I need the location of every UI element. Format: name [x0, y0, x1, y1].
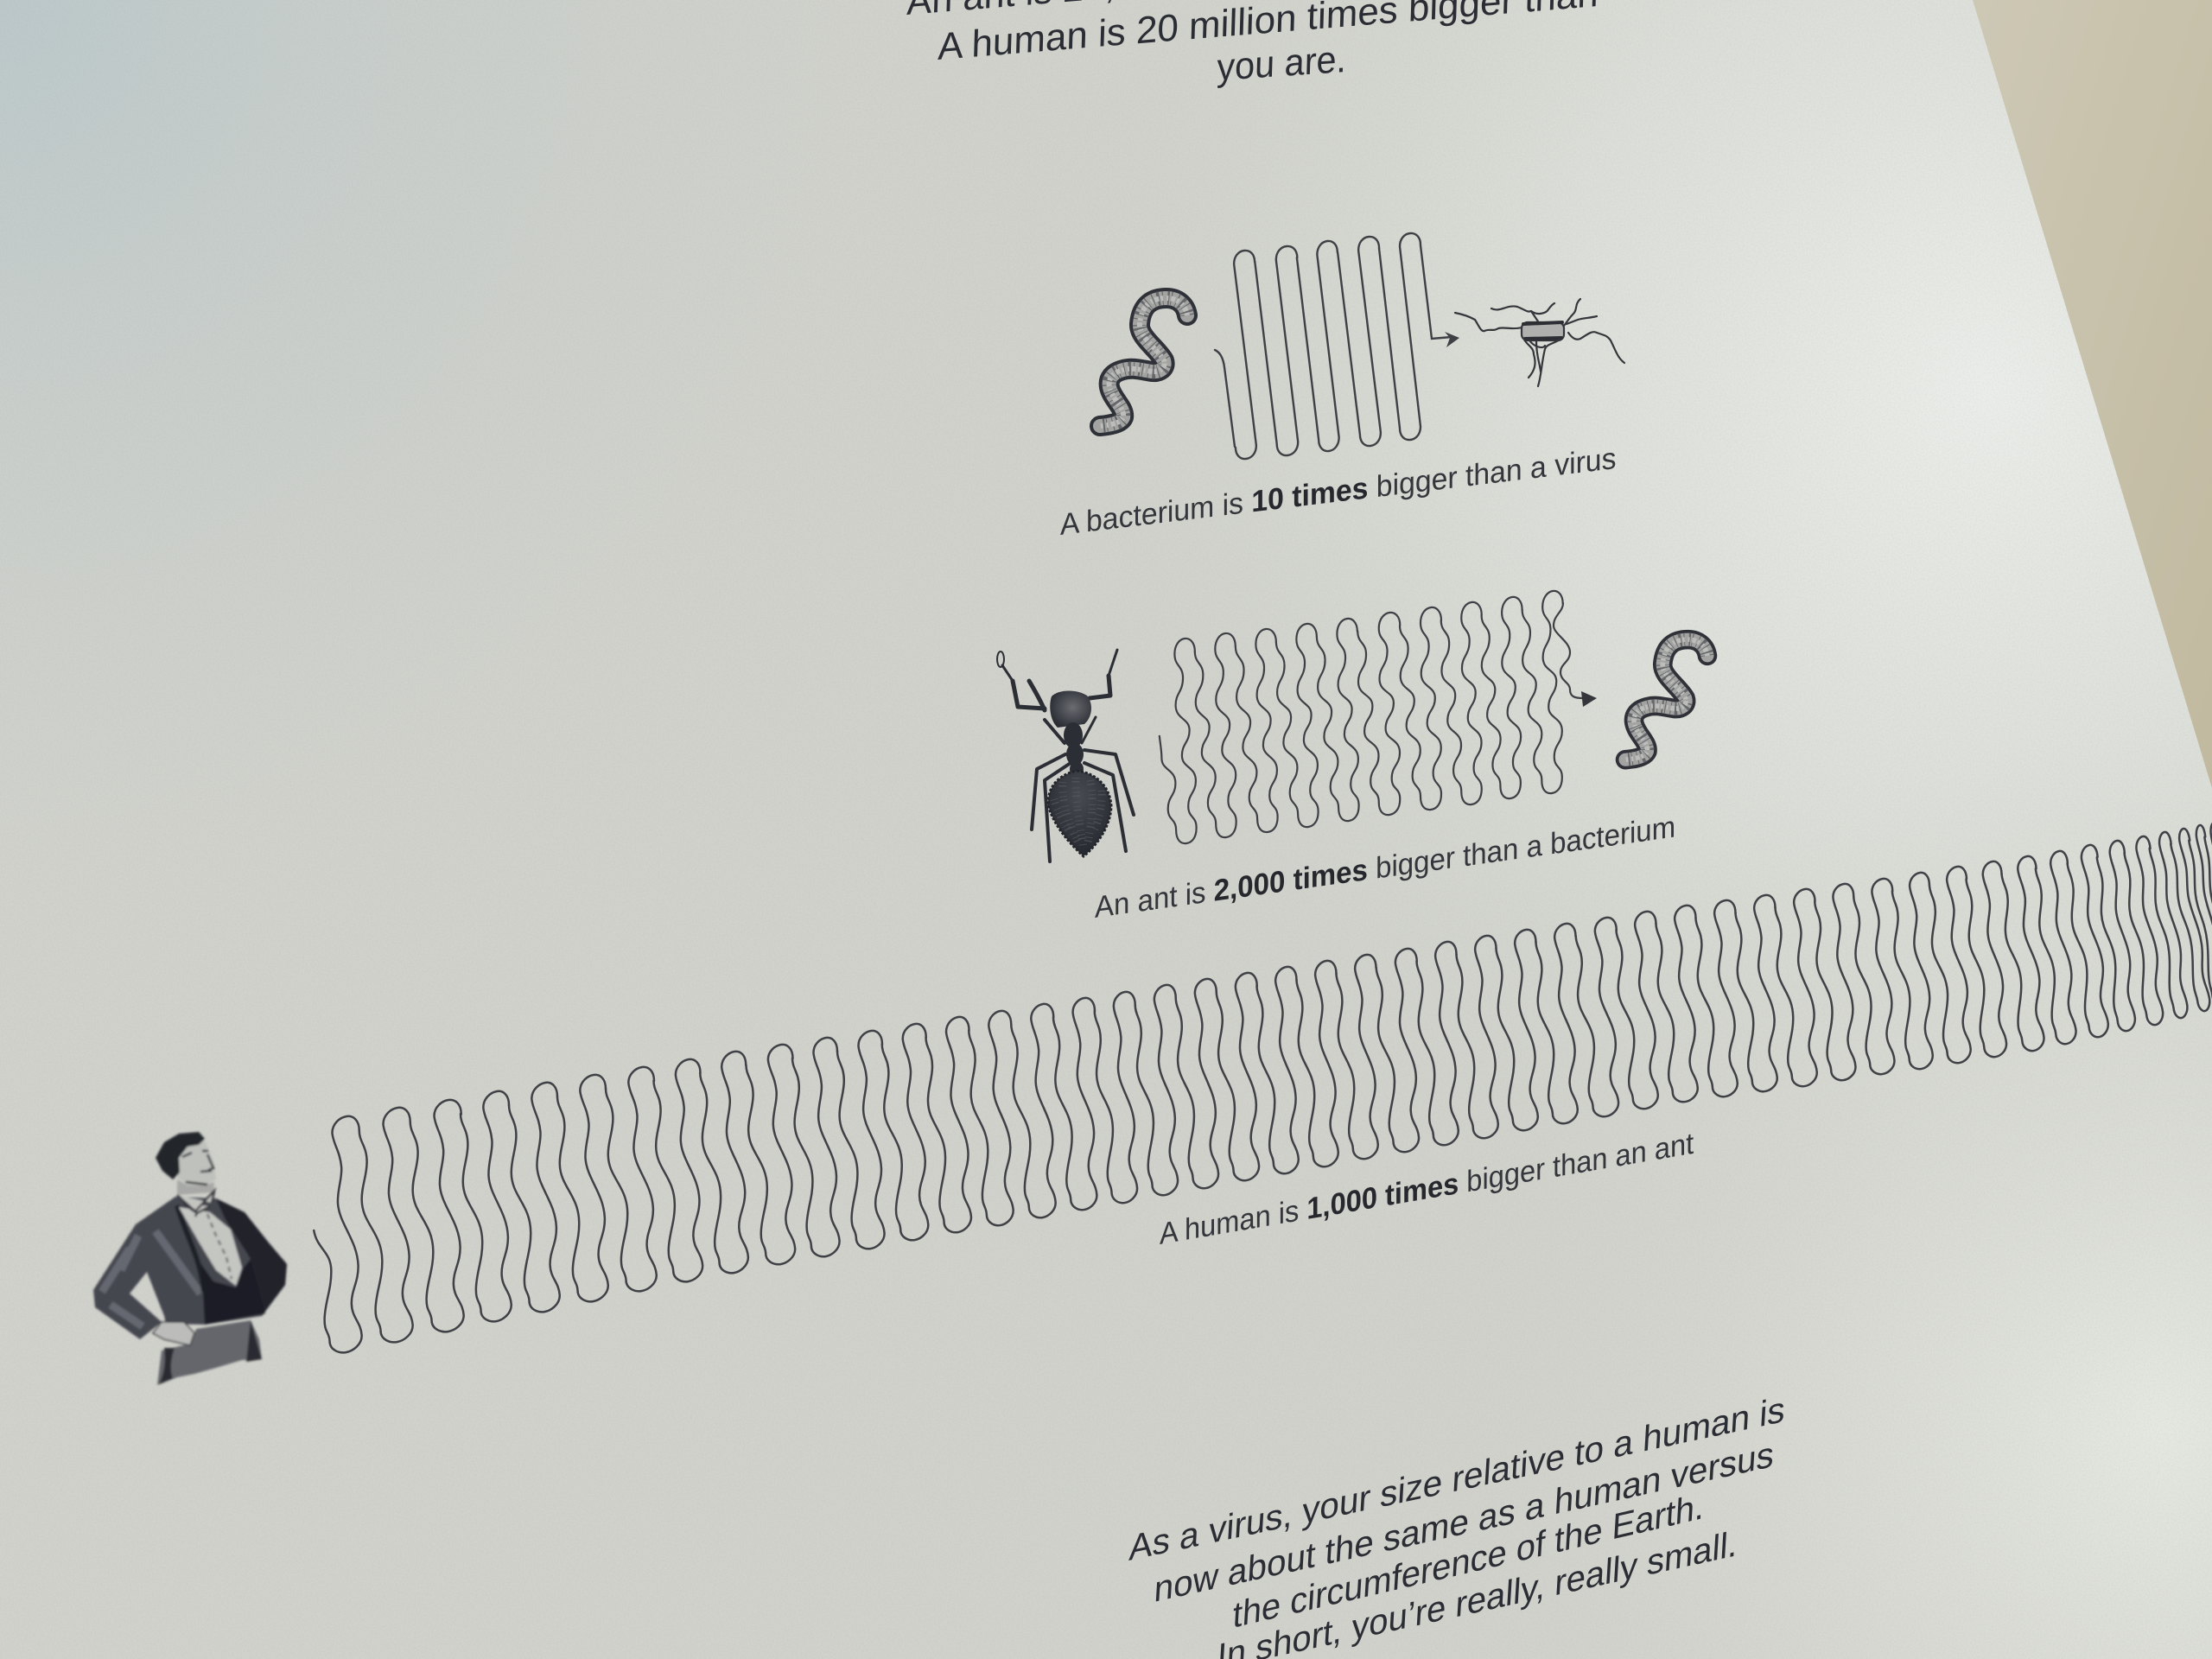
icon: bacterium — [1625, 639, 1707, 760]
icon: bacterium — [1100, 298, 1187, 426]
ant thorax — [1064, 722, 1084, 777]
caption: An ant is 2,000 times bigger than a bacterium — [1095, 810, 1675, 925]
lapel edge — [177, 1205, 204, 1292]
jacket — [93, 1197, 287, 1339]
line three: the circumference of the Earth. — [1231, 1485, 1706, 1636]
intro text — [906, 0, 1622, 89]
hand — [153, 1322, 194, 1345]
icon: virus — [1455, 299, 1624, 386]
icon: human — [93, 1132, 287, 1385]
trouser shadow — [159, 1320, 262, 1384]
jacket lights — [102, 1231, 200, 1326]
arrow — [1581, 691, 1597, 707]
ant abdomen — [1048, 771, 1111, 856]
row: bacterium and virus — [1060, 232, 1624, 542]
line one: As a virus, your size relative to a human is — [1128, 1389, 1786, 1568]
facial features — [182, 1151, 213, 1185]
line two: now about the same as a human versus — [1153, 1433, 1775, 1610]
collar and bow tie — [177, 1191, 214, 1217]
row: ant and bacterium — [997, 589, 1707, 925]
neck — [177, 1179, 214, 1195]
hair — [156, 1132, 205, 1179]
third line: you are. — [1217, 38, 1347, 89]
caption: A human is 1,000 times bigger than an ant — [1160, 1127, 1694, 1251]
ant legs and antennae — [997, 650, 1134, 861]
arrow — [1445, 332, 1459, 347]
serpentine line: ten times — [1215, 232, 1452, 460]
trousers — [157, 1320, 262, 1385]
shirt — [179, 1207, 242, 1286]
row: human and ant — [93, 822, 2212, 1385]
icon: ant — [997, 650, 1134, 861]
jacket dark side — [216, 1198, 287, 1316]
waistcoat — [201, 1259, 265, 1325]
table behind the page edge — [1973, 0, 2212, 788]
caption: A bacterium is 10 times bigger than a virus — [1060, 442, 1616, 542]
face — [177, 1141, 216, 1185]
ant head — [1050, 690, 1091, 728]
serpentine line: one thousand times — [314, 822, 2212, 1357]
serpentine line: two thousand times — [1159, 589, 1583, 847]
shirt buttons — [207, 1214, 232, 1279]
closing text — [1128, 1389, 1786, 1659]
